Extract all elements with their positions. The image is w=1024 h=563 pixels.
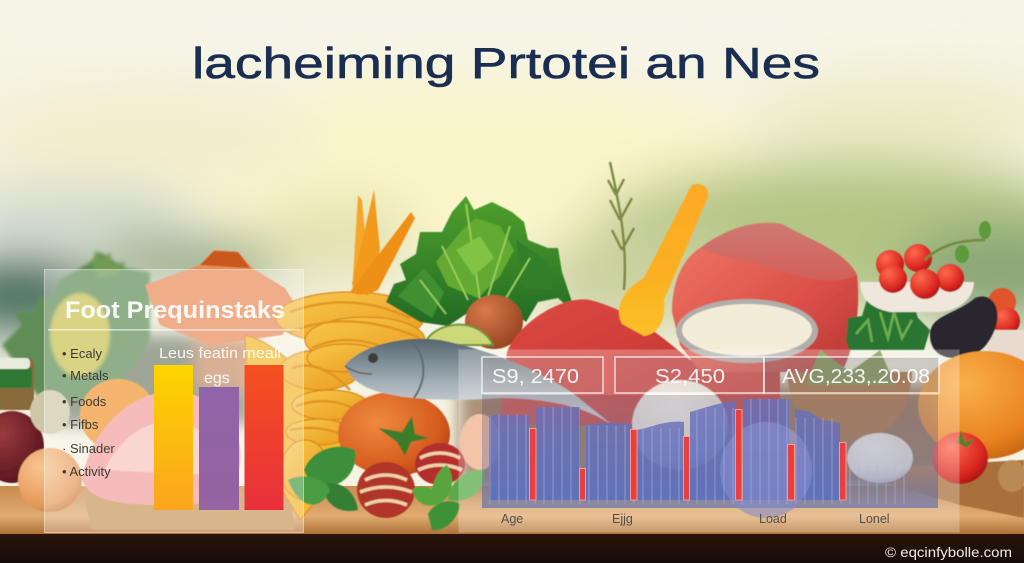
icon: garlic bulb bbox=[30, 390, 70, 434]
icon: blue-tinted round shape bbox=[720, 422, 812, 518]
chart background band bbox=[482, 395, 938, 508]
icon: jar bbox=[0, 358, 34, 410]
icon: lettuce bbox=[386, 196, 576, 326]
food arrangement bbox=[0, 162, 1024, 530]
icon: fish bbox=[345, 339, 612, 425]
icon: nuts bbox=[998, 460, 1024, 492]
icon: eggplant bbox=[930, 297, 998, 358]
icon: lime bbox=[424, 325, 493, 345]
icon: rice bowl bbox=[676, 299, 818, 363]
icon: carrots bbox=[350, 190, 415, 296]
watermark: © eqcinfybolle.com bbox=[885, 545, 1012, 560]
axis labels: Load bbox=[759, 512, 787, 526]
table front bbox=[0, 534, 1024, 563]
icon: wood board right bbox=[845, 460, 1024, 518]
icon: salmon slab bbox=[145, 250, 300, 345]
text block: bullet list: • Metals bbox=[62, 368, 109, 383]
icon: cutting board bbox=[82, 490, 295, 530]
text block: bullet list: • Ecaly bbox=[62, 346, 102, 361]
panel: food list and bars bbox=[44, 270, 304, 532]
title: lacheiming Prtotei an Nes bbox=[192, 39, 820, 88]
icon: egg behind chart bbox=[460, 414, 500, 470]
text block: chart caption bbox=[159, 346, 281, 387]
shadow backdrop behind food bbox=[50, 335, 960, 490]
axis labels: Ejjg bbox=[612, 512, 633, 526]
bar chart: red columns bbox=[530, 410, 846, 500]
icon: herb sprig bbox=[608, 162, 634, 290]
icon: tomato right bbox=[932, 430, 988, 484]
bar chart: three coloured bars bbox=[154, 365, 284, 510]
icon: red meat bbox=[500, 299, 780, 425]
icon: big tomato bbox=[338, 392, 450, 476]
icon: plum bbox=[0, 411, 44, 483]
metric box: first value bbox=[482, 357, 603, 393]
icon: pasta bbox=[245, 292, 425, 520]
icon: big orange bbox=[918, 351, 1024, 459]
icon: basil right bbox=[412, 465, 484, 530]
axis labels: Age bbox=[501, 512, 523, 526]
divider bbox=[48, 329, 300, 331]
table top bbox=[0, 486, 1024, 536]
icon: large beef cut bbox=[672, 223, 858, 372]
text block: bullet list: • Activity bbox=[62, 464, 111, 479]
icon: striped radishes bbox=[357, 443, 465, 518]
icon: ham slice bbox=[82, 392, 241, 505]
icon: white egg centre bbox=[632, 380, 728, 470]
icon: tomato bowl bbox=[860, 221, 991, 312]
panel: metrics and column chart bbox=[458, 350, 960, 532]
bar chart: blue columns bbox=[489, 398, 909, 518]
text block: chart caption: Leus featin meali bbox=[159, 346, 281, 362]
text block: bullet list: • Foods bbox=[62, 394, 107, 409]
heading: panel title: Foot Prequinstaks bbox=[65, 297, 285, 324]
icon: basil left bbox=[288, 447, 358, 511]
metric box: second value: S2,450 bbox=[655, 366, 725, 388]
icon: yellow herb mass bbox=[50, 293, 110, 377]
axis labels bbox=[501, 512, 890, 526]
icon: yellow spoon bbox=[619, 184, 708, 336]
text block: bullet list: • Fifbs bbox=[62, 417, 99, 432]
icon: left fern bbox=[2, 250, 150, 400]
icon: brown bowl bbox=[787, 350, 912, 442]
metric box: second value bbox=[615, 357, 764, 393]
icon: orange fruit bbox=[80, 379, 156, 451]
text block: bullet list bbox=[62, 346, 115, 479]
icon: parsley bbox=[846, 288, 930, 350]
text block: bullet list: · Sinader bbox=[62, 441, 115, 456]
metric box: first value: S9, 2470 bbox=[492, 366, 579, 388]
axis labels: Lonel bbox=[859, 512, 890, 526]
icon: right tomatoes and ramekin bbox=[988, 288, 1024, 360]
metric box: third value bbox=[764, 357, 939, 393]
icon: egg left bbox=[18, 448, 82, 512]
text block: chart caption: egs bbox=[204, 370, 230, 387]
icon: brown egg bbox=[465, 295, 523, 349]
metric box: third value: AVG,233,.20.08 bbox=[782, 366, 930, 388]
icon: small egg right bbox=[847, 433, 913, 483]
